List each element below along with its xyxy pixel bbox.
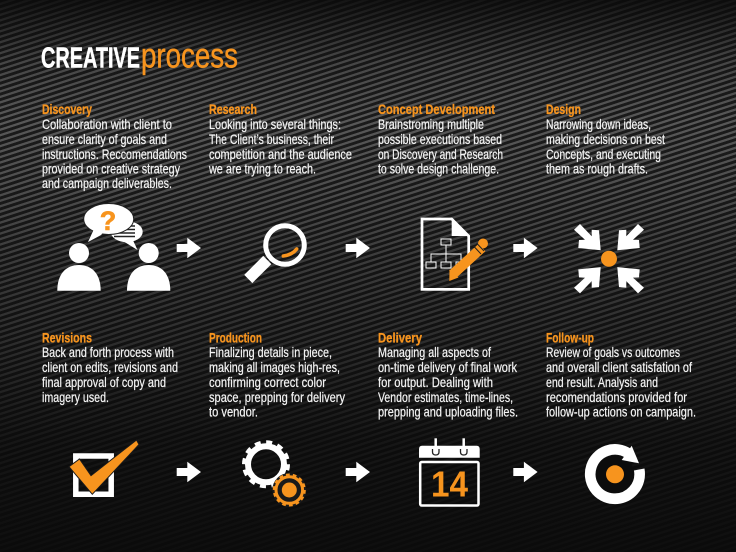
icon: gears <box>244 442 306 507</box>
icon: checkbox with check mark <box>69 440 139 494</box>
text block: Design: them as rough drafts. <box>546 160 648 176</box>
icon: two people talking <box>57 204 170 291</box>
arrow: production to delivery <box>346 462 370 482</box>
text block: Delivery: Vendor estimates, time-lines, <box>378 389 513 405</box>
icon: magnifying glass <box>248 226 304 279</box>
text block: Production: space, prepping for delivery <box>209 389 345 405</box>
text block: Concept Development <box>378 101 503 176</box>
text block: Research <box>208 101 352 176</box>
text block: Follow-up: end result. Analysis and <box>546 374 658 390</box>
text block: Research: competition and the audience <box>209 146 352 162</box>
text block: Delivery: Delivery <box>378 330 422 346</box>
text block: Discovery <box>42 101 187 191</box>
text block: Follow-up: recomendations provided for <box>546 389 687 405</box>
icon: calendar: 14 <box>431 464 468 505</box>
text block: Delivery <box>378 330 518 420</box>
text block: Discovery: ensure clarity of goals and <box>42 131 167 147</box>
arrow: concept to design <box>513 238 538 258</box>
text block: Revisions: Revisions <box>42 330 92 346</box>
title <box>41 36 238 76</box>
text block: Production: Production <box>209 330 262 346</box>
title: process <box>141 36 238 76</box>
text block: Discovery: instructions. Reccomendations <box>42 146 187 162</box>
text block: Production: Finalizing details in piece, <box>209 344 332 360</box>
arrow: revisions to production <box>177 462 201 482</box>
text block: Follow-up <box>546 330 696 420</box>
text block: Research: Looking into several things: <box>209 116 341 132</box>
text block: Design: Concepts, and executing <box>546 146 661 162</box>
text block: Production <box>209 330 345 420</box>
text block: Production: making all images high-res, <box>209 359 340 375</box>
text block: Design: making decisions on best <box>546 131 665 147</box>
text block: Discovery: Discovery <box>42 101 92 117</box>
text block: Concept Development: possible executions based <box>378 131 502 147</box>
icon: document with flowchart and pencil <box>422 218 488 289</box>
text block: Delivery: prepping and uploading files. <box>378 404 518 420</box>
arrow: research to concept <box>346 238 370 258</box>
text block: Revisions: Back and forth process with <box>42 344 174 360</box>
text block: Follow-up: follow-up actions on campaign. <box>546 404 696 420</box>
arrow: discovery to research <box>177 238 201 258</box>
text block: Concept Development: on Discovery and Research <box>378 146 503 162</box>
text block: Discovery: and campaign deliverables. <box>42 175 172 191</box>
icon: arrows converging on dot <box>574 224 644 293</box>
text block: Delivery: Managing all aspects of <box>378 344 491 360</box>
text block: Research: we are trying to reach. <box>208 160 316 176</box>
text block: Design: Design <box>546 101 581 117</box>
icon: two people talking: ? <box>100 206 116 236</box>
text block: Production: confirming correct color <box>209 374 326 390</box>
text block: Research: The Client’s business, their <box>209 131 334 147</box>
text block: Delivery: for output. Dealing with <box>378 374 493 390</box>
text block: Concept Development: to solve design challenge. <box>378 160 499 176</box>
text block: Follow-up: Follow-up <box>546 330 594 346</box>
icon: circular refresh arrow <box>590 446 640 499</box>
text block: Follow-up: and overall client satisfation of <box>546 359 692 375</box>
text block: Concept Development: Brainstroming multiple <box>378 116 484 132</box>
text block: Production: to vendor. <box>209 404 258 420</box>
text block: Delivery: on-time delivery of final work <box>378 359 518 375</box>
text block: Revisions: final approval of copy and <box>42 374 166 390</box>
text block: Research: Research <box>209 101 257 117</box>
icon: calendar <box>419 438 480 506</box>
text block: Concept Development: Concept Development <box>378 101 495 117</box>
text block: Discovery: provided on creative strategy <box>42 160 180 176</box>
text block: Revisions: client on edits, revisions and <box>42 359 178 375</box>
text block: Revisions: imagery used. <box>42 389 109 405</box>
text block: Design <box>546 101 665 176</box>
text block: Discovery: Collaboration with client to <box>42 116 172 132</box>
arrow: delivery to follow-up <box>513 462 538 482</box>
text block: Revisions <box>42 330 178 405</box>
text block: Design: Narrowing down ideas, <box>546 116 651 132</box>
text block: Follow-up: Review of goals vs outcomes <box>546 344 680 360</box>
title: CREATIVE <box>41 42 140 74</box>
